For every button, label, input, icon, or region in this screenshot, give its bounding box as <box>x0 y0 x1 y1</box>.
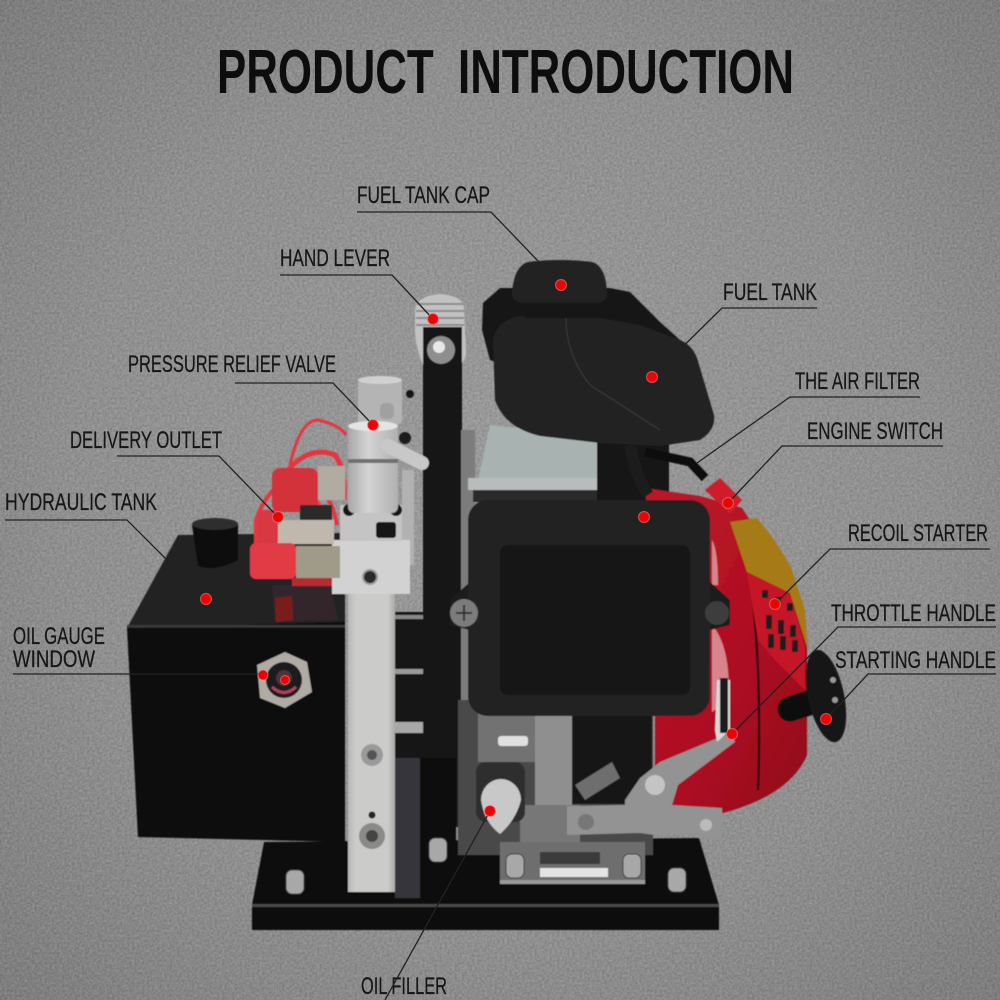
machine illustration <box>127 260 853 930</box>
label: hydraulic tank <box>5 489 212 604</box>
fuel tank cap <box>512 260 607 318</box>
label: oil filler <box>361 806 496 1000</box>
label: hand lever <box>280 245 438 324</box>
fuel tank rear <box>482 288 680 400</box>
engine cylinder head <box>468 425 669 502</box>
delivery outlet couplers <box>250 420 346 586</box>
fuel hose <box>630 445 648 495</box>
label: pressure relief valve <box>128 351 378 430</box>
tank filler knob <box>192 518 238 568</box>
label: starting handle <box>820 647 996 724</box>
yellow label <box>730 518 808 650</box>
label: hand lever: HAND LEVER <box>280 245 390 272</box>
aluminium column <box>348 590 395 892</box>
fuel tank body <box>493 316 714 446</box>
oil filler cap <box>476 762 525 834</box>
mounting bracket <box>500 842 645 884</box>
label: oil gauge window: OIL GAUGE <box>13 623 105 650</box>
base plate <box>252 838 719 930</box>
label: fuel tank cap <box>357 182 566 290</box>
fuel tank seam <box>566 318 660 430</box>
label: the air filter: THE AIR FILTER <box>795 368 920 395</box>
label: delivery outlet <box>70 427 284 522</box>
label: fuel tank cap: FUEL TANK CAP <box>357 182 490 209</box>
engine strip behind filter <box>461 430 475 720</box>
throttle handle linkage <box>567 678 735 840</box>
label: engine switch <box>722 418 943 508</box>
label: oil gauge window: WINDOW <box>13 646 95 673</box>
engine lower crankcase <box>458 700 653 855</box>
label: delivery outlet: DELIVERY OUTLET <box>70 427 222 454</box>
label: oil gauge window <box>13 623 290 684</box>
starting handle <box>790 646 853 746</box>
mounting bolts <box>286 838 686 894</box>
hydraulic tank <box>127 533 345 842</box>
red engine cover <box>645 488 807 813</box>
label: oil filler: OIL FILLER <box>361 973 447 1000</box>
rear relief valve <box>358 376 414 444</box>
hand lever grip <box>415 294 466 367</box>
label: fuel tank: FUEL TANK <box>723 279 817 306</box>
label: the air filter <box>638 368 920 522</box>
label: throttle handle <box>726 600 996 740</box>
label: hydraulic tank: HYDRAULIC TANK <box>5 489 157 516</box>
manifold block <box>332 470 414 594</box>
oil gauge window fitting <box>257 652 312 708</box>
label: pressure relief valve: PRESSURE RELIEF VALVE <box>128 351 336 378</box>
rods between column and lever <box>395 612 425 898</box>
air filter housing <box>450 500 730 716</box>
label: engine switch: ENGINE SWITCH <box>807 418 943 445</box>
pressure valve handle <box>388 446 422 463</box>
recoil vent grille <box>747 572 805 690</box>
label: recoil starter <box>770 520 990 610</box>
label: fuel tank <box>646 279 817 382</box>
air filter wiring <box>645 452 705 478</box>
black lever arm <box>420 327 462 904</box>
front relief valve <box>348 421 398 513</box>
engine switch <box>705 478 742 514</box>
